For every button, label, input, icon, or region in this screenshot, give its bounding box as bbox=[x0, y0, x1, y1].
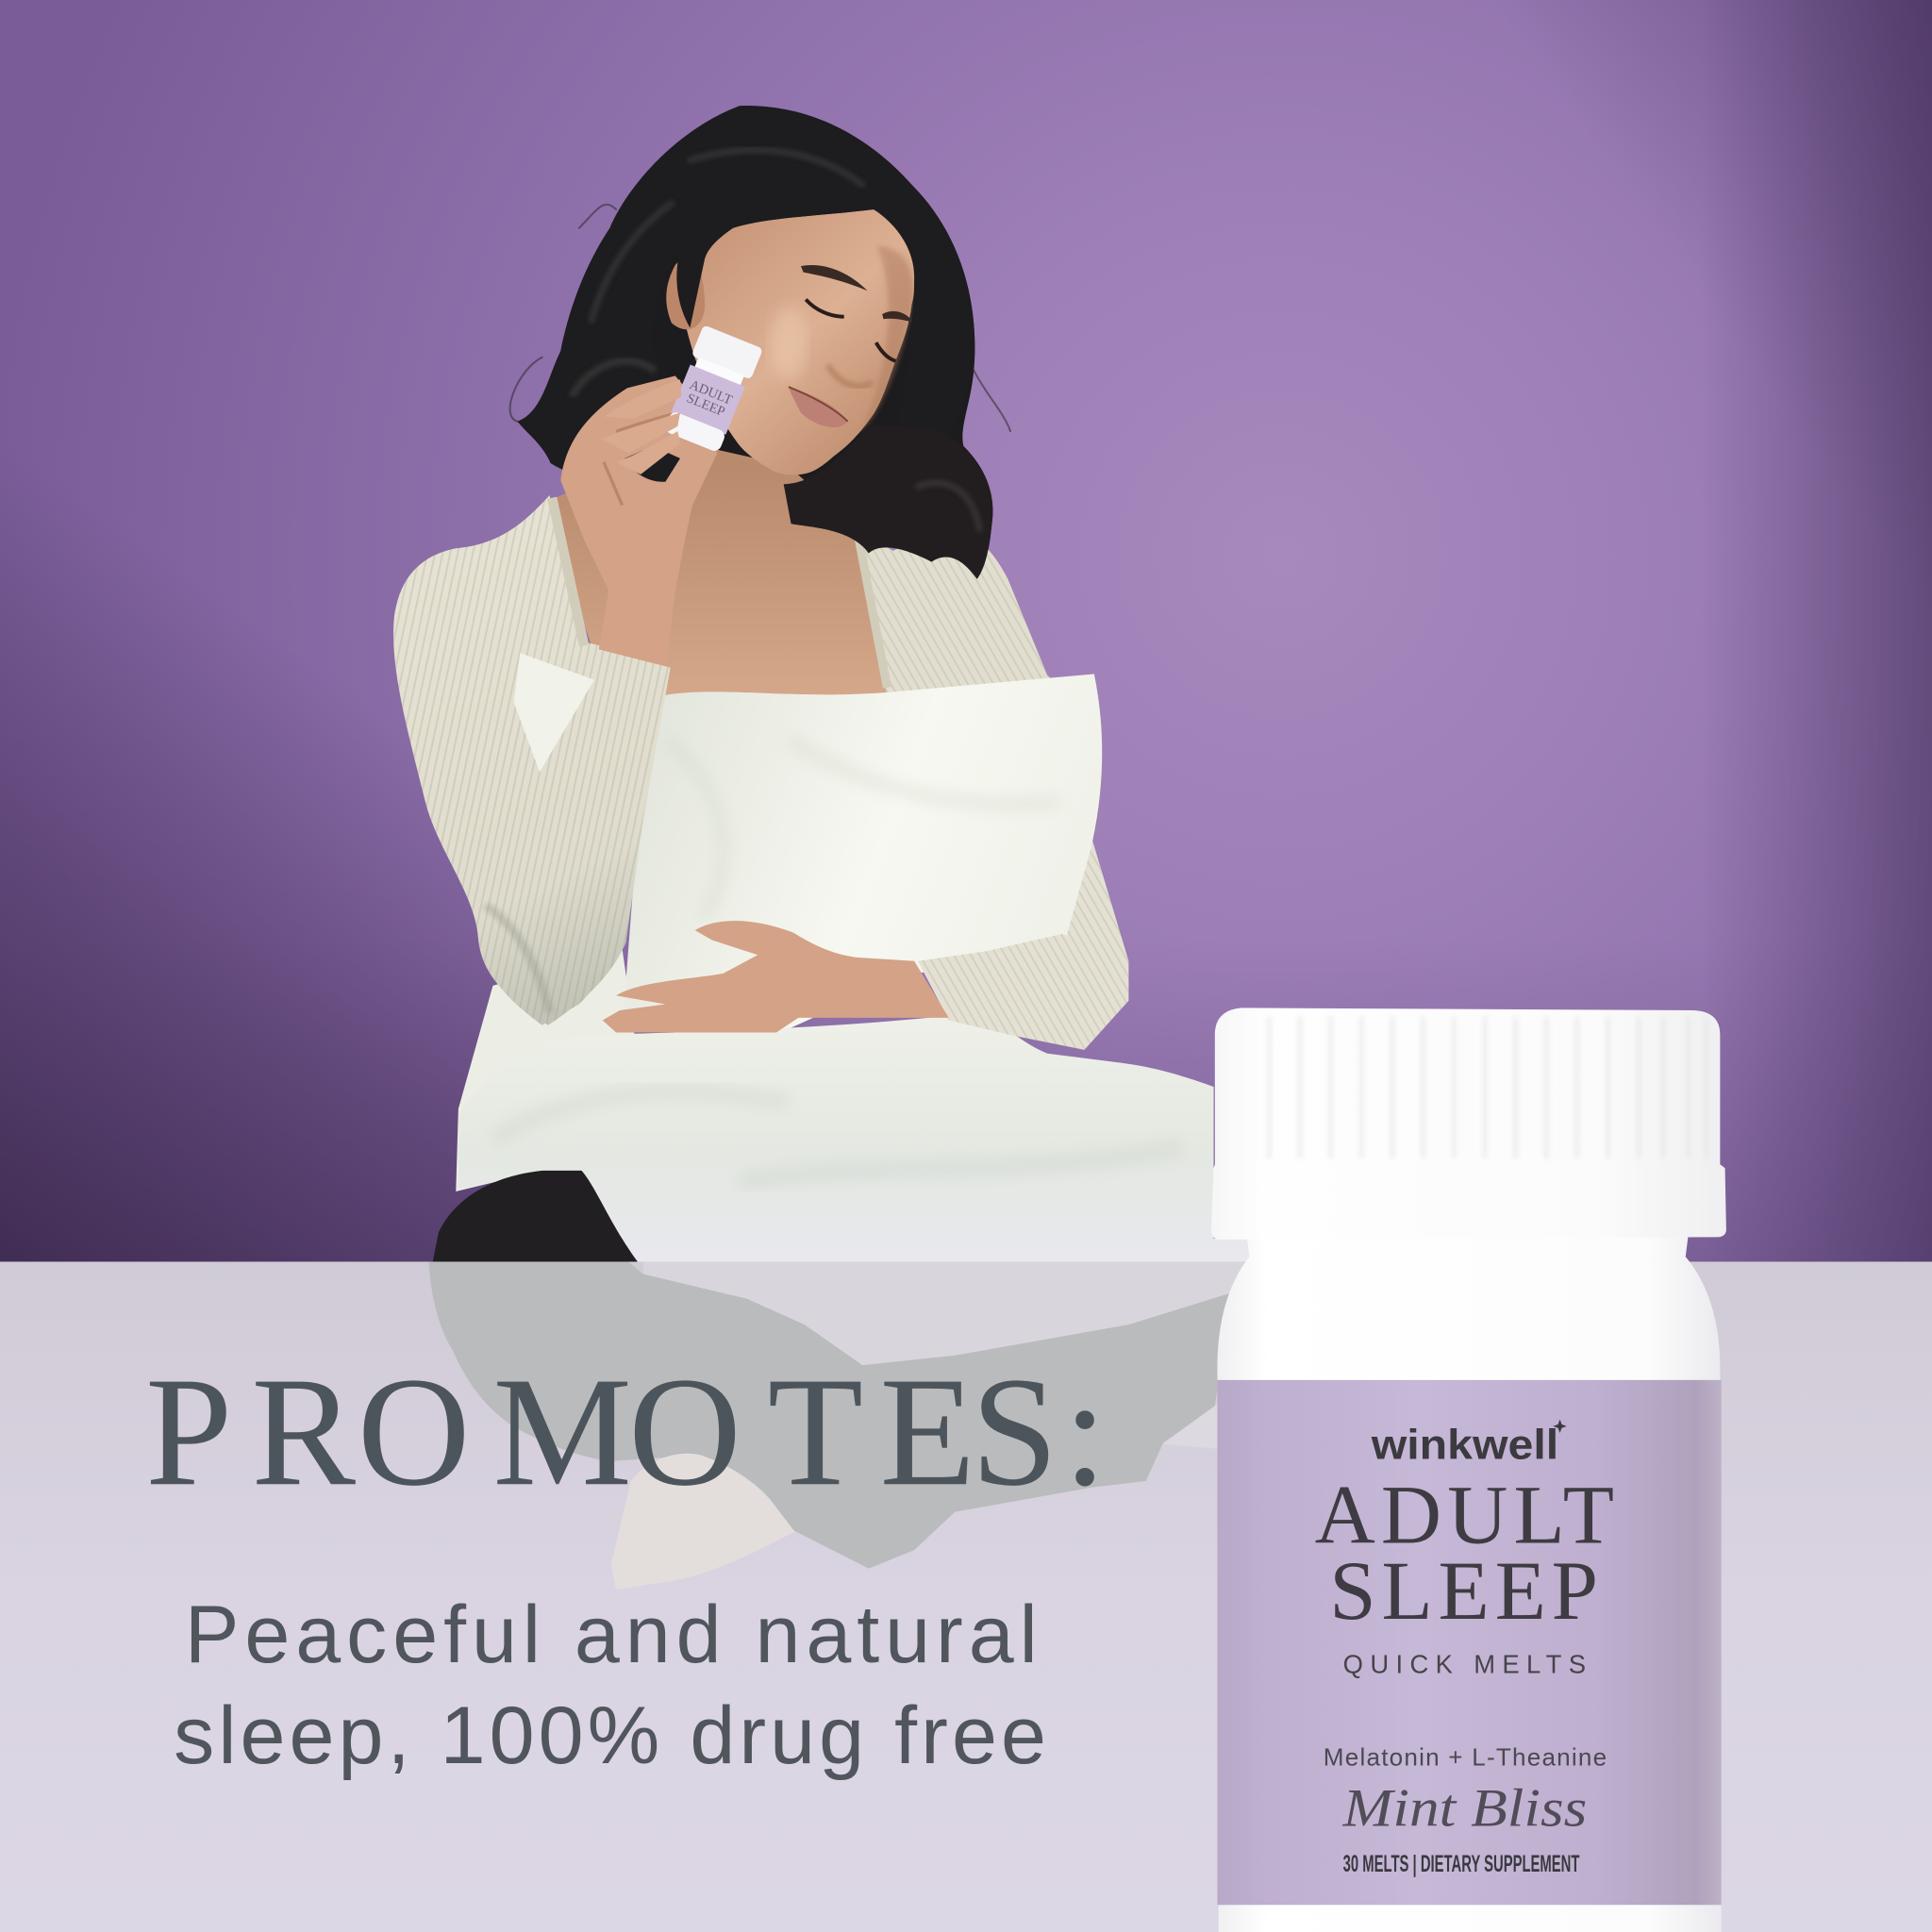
brand name: winkwell bbox=[1371, 1422, 1558, 1468]
dark leggings bbox=[432, 1170, 638, 1262]
small bottle held in hand: SLEEP bbox=[685, 391, 727, 420]
small bottle label text: ADULT bbox=[688, 377, 735, 408]
hair gap between fingers bbox=[625, 446, 680, 482]
ear bbox=[666, 258, 705, 329]
sweater torso bottom bbox=[456, 949, 635, 1191]
ingredients: Melatonin + L-Theanine bbox=[1324, 1743, 1607, 1772]
face bbox=[666, 209, 915, 475]
ghosted pillow below line bbox=[643, 1261, 1272, 1365]
ghosted foot bbox=[611, 1454, 794, 1590]
closed eye right bbox=[876, 342, 896, 361]
sweater left upper arm bbox=[393, 495, 671, 1025]
hair curls lower right bbox=[784, 425, 992, 579]
product bottle bbox=[1211, 1008, 1726, 1932]
background: purple wall bbox=[0, 0, 1932, 1261]
text block: benefit line 2: sleep, 100% drug free bbox=[174, 1690, 1046, 1781]
lower pillow bbox=[458, 1013, 1272, 1269]
sweater right shoulder bbox=[855, 540, 1051, 692]
sweater right lower sleeve bbox=[1066, 841, 1128, 1050]
nose bbox=[828, 365, 873, 387]
quantity line: 30 MELTS | DIETARY SUPPLEMENT bbox=[1343, 1852, 1579, 1877]
product name line 1: ADULT bbox=[1315, 1469, 1614, 1561]
hair highlights and wisps bbox=[510, 150, 1010, 530]
ghosted knee highlight bbox=[1163, 1402, 1220, 1449]
fingers over small bottle bbox=[601, 379, 681, 475]
flavor: Mint Bliss bbox=[1342, 1779, 1587, 1839]
closed eye left bbox=[806, 299, 844, 317]
product name line 2: SLEEP bbox=[1329, 1545, 1598, 1638]
product type: QUICK MELTS bbox=[1343, 1650, 1586, 1679]
photo: woman holding pillow and bottle bbox=[393, 106, 1272, 1269]
heading: PROMOTES: PROMOTES: bbox=[145, 1344, 1107, 1518]
upper pillow bbox=[623, 674, 1102, 1029]
finger creases bbox=[604, 413, 677, 506]
pillow corner tab bbox=[513, 653, 594, 772]
bottle body bbox=[1217, 1237, 1722, 1932]
bottle label bbox=[1217, 1380, 1722, 1905]
text block: benefit line 1: Peaceful and natural bbox=[185, 1590, 1038, 1680]
brow right bbox=[882, 311, 914, 323]
forearm sleeve bbox=[477, 649, 671, 1025]
sweater cuff right bbox=[918, 934, 1128, 1050]
lower translucent panel bbox=[0, 1261, 1932, 1932]
brow left bbox=[801, 265, 868, 291]
lips bbox=[789, 387, 848, 427]
hand on pillow bbox=[603, 921, 949, 1033]
brand sparkle bbox=[1553, 1420, 1567, 1433]
chest skin bbox=[557, 449, 887, 695]
ghosted leg and knee bbox=[429, 1261, 1232, 1569]
hair back bbox=[518, 106, 992, 579]
small bottle held in hand bbox=[661, 325, 763, 454]
bottle cap bbox=[1211, 1008, 1726, 1240]
hair front bbox=[518, 106, 974, 492]
raised hand bbox=[560, 375, 717, 667]
